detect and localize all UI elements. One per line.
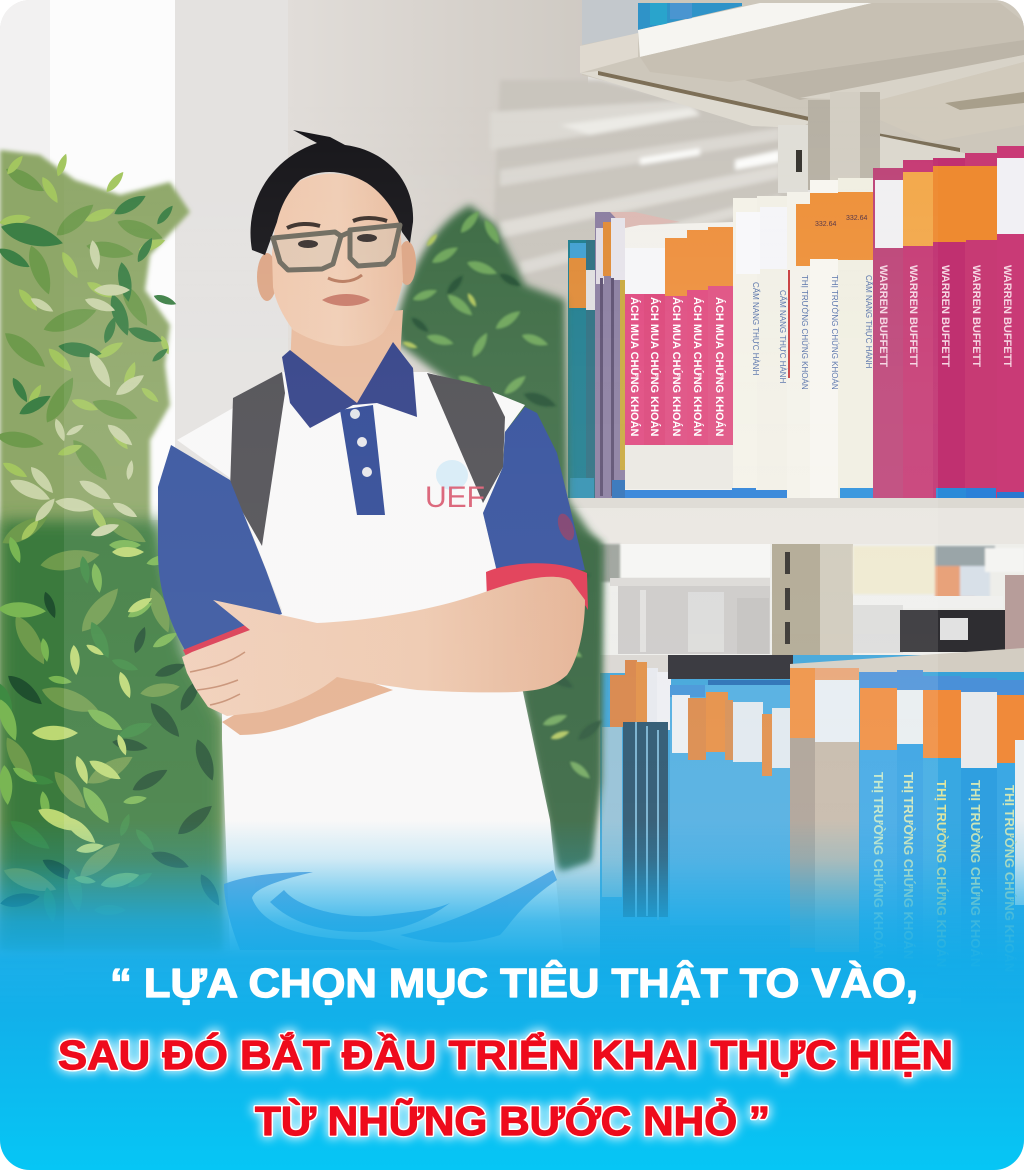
bookshelf row 1: magenta Warren Buffett books: WARREN BUFFETT (907, 265, 919, 367)
white polo shirt (177, 372, 563, 950)
background wall and column (0, 0, 588, 520)
bookshelf row 2: blue and orange books: THỊ TRƯỜNG CHỨNG KHOÁN (901, 772, 916, 959)
UEF logo: UEF (425, 481, 485, 514)
sleeve badge (555, 511, 577, 543)
right sleeve red cuff (486, 563, 588, 610)
bookshelf row 2: blue and orange books: THỊ TRƯỜNG CHỨNG KHOÁN (871, 772, 886, 959)
lower leaves (0, 590, 224, 910)
ears (257, 253, 277, 301)
left sleeve red cuff (183, 624, 252, 664)
bookshelf row 2: blue and orange books: THỊ TRƯỜNG CHỨNG KHOÁN (968, 780, 983, 967)
bookshelf row 1: cream handbook books: CẨM NANG THỰC HÀNH (751, 282, 760, 376)
bottom cyan gradient fade (0, 820, 1024, 1170)
bookshelf row 1: cream handbook books (732, 178, 875, 505)
dense filler leaves (0, 163, 181, 898)
quote line 2: SAU ĐÓ BẮT ĐẦU TRIỂN KHAI THỰC HIỆN (58, 1031, 953, 1078)
bookshelf row 1: magenta Warren Buffett books: WARREN BUFFETT (877, 265, 889, 367)
placket with buttons (340, 405, 385, 515)
middle shelf plank, upright posts and background shelves (570, 498, 1024, 660)
bookshelf row 1: cream handbook books: THỊ TRƯỜNG CHỨNG KHOÁN (830, 275, 839, 390)
shirt hem wave pattern (224, 870, 557, 950)
bookshelf row 1: cream handbook books: CẨM NANG THỰC HÀNH (864, 275, 873, 369)
bookshelf row 1: pink stock-buying books: ÁCH MUA CHỨNG KHOÁN (648, 297, 661, 437)
left plant foliage (0, 150, 224, 950)
forearm and hand (182, 577, 585, 716)
bookshelf row 1: magenta Warren Buffett books: WARREN BUFFETT (970, 265, 982, 367)
right plant behind student (395, 205, 605, 870)
bookshelf row 1: cream handbook books: CẨM NANG THỰC HÀNH (778, 290, 787, 384)
right sleeve (483, 407, 585, 572)
bookshelf row 1: magenta Warren Buffett books (873, 146, 1024, 512)
eyes and brows (287, 218, 387, 248)
glasses (273, 225, 400, 270)
bookshelf row 1: cream handbook books: 332.64 (815, 221, 837, 228)
lower arm (222, 672, 393, 735)
blurred ceiling stripes behind shelf (490, 80, 790, 300)
bookshelf row 1: cream handbook books: 332.64 (846, 215, 868, 222)
upper leaves (0, 152, 171, 543)
left sleeve (158, 445, 282, 652)
UEF logo (425, 460, 485, 514)
quote text (58, 960, 953, 1144)
quote line 1: “ LỰA CHỌN MỤC TIÊU THẬT TO VÀO, (110, 960, 918, 1006)
collar (282, 342, 417, 428)
red line glow: TỪ NHỮNG BƯỚC NHỎ ” (255, 1098, 770, 1144)
bookshelf row 2: blue and orange books: THỊ TRƯỜNG CHỨNG KHOÁN (1002, 785, 1017, 972)
bookshelf row 1: cream handbook books: THỊ TRƯỜNG CHỨNG KHOÁN (800, 275, 809, 390)
bookshelf row 1: pink stock-buying books: ÁCH MUA CHỨNG KHOÁN (713, 297, 726, 437)
translucent inner overlay panel (64, 100, 938, 1025)
hair (250, 130, 413, 255)
quote line 2: SAU ĐÓ BẮT ĐẦU TRIỂN KHAI THỰC HIỆN (58, 1031, 953, 1078)
bookshelf row 1: pink stock-buying books: ÁCH MUA CHỨNG KHOÁN (628, 297, 641, 437)
quote line 3: TỪ NHỮNG BƯỚC NHỎ ” (255, 1098, 770, 1144)
bookshelf row 1: pink stock-buying books: ÁCH MUA CHỨNG KHOÁN (691, 297, 704, 437)
nose and mouth (322, 275, 370, 306)
bookshelf row 2: blue and orange books (600, 648, 1024, 1008)
face (272, 174, 403, 346)
bookshelf row 1: magenta Warren Buffett books: WARREN BUFFETT (1001, 265, 1013, 367)
neck (290, 310, 403, 405)
bookshelf row 1: teal books (568, 240, 595, 498)
top bookshelf frame (580, 0, 1024, 193)
quote line 3: TỪ NHỮNG BƯỚC NHỎ ” (255, 1098, 770, 1144)
bookshelf row 1: pink stock-buying books: ÁCH MUA CHỨNG KHOÁN (670, 297, 683, 437)
bookshelf row 1: pink stock-buying books (625, 222, 733, 500)
bookshelf row 2: blue and orange books: THỊ TRƯỜNG CHỨNG KHOÁN (934, 780, 949, 967)
red line glow: SAU ĐÓ BẮT ĐẦU TRIỂN KHAI THỰC HIỆN (58, 1031, 953, 1078)
bookshelf row 1: purple books (595, 212, 680, 498)
bookshelf row 1: magenta Warren Buffett books: WARREN BUFFETT (939, 265, 951, 367)
red line glow (58, 1031, 953, 1144)
student (158, 130, 588, 950)
backpack straps (230, 372, 505, 546)
